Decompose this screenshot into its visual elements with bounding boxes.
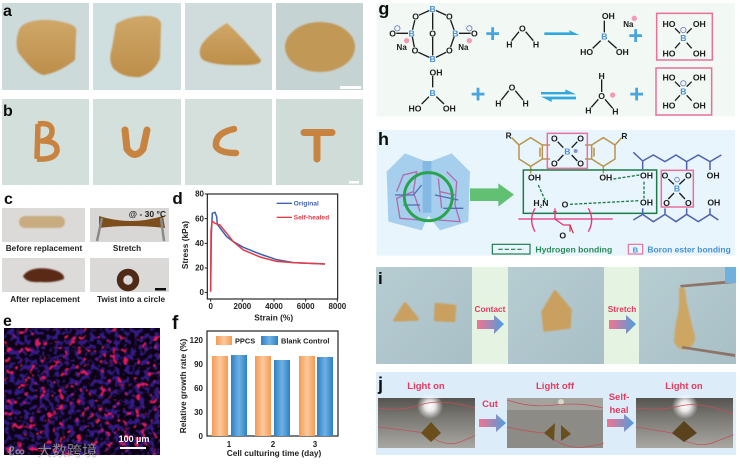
plus 3: + — [471, 80, 485, 108]
panel d: stress-strain chart — [172, 189, 347, 323]
bars day 1 — [212, 355, 247, 436]
label c: c — [4, 191, 13, 208]
y ticks f: 120 — [190, 336, 204, 345]
watermark logo: ℓ∞ — [8, 443, 25, 459]
boric acid 1: OH — [616, 47, 629, 57]
gel disc — [285, 22, 355, 72]
hydronium: H — [612, 107, 618, 117]
hydronium: H — [585, 106, 591, 116]
caption after: After replacement — [10, 295, 80, 304]
legend — [277, 201, 329, 222]
photo light off — [507, 398, 603, 448]
hydronium: H — [599, 71, 605, 81]
scale bar b — [349, 181, 359, 184]
hydronium — [585, 71, 618, 117]
tetrahydroxyborate box 2: HO — [663, 72, 676, 82]
scale label: 100 µm — [119, 434, 149, 444]
x ticks: 8000 — [328, 302, 347, 311]
plus 2: + — [628, 22, 643, 50]
water 2 — [495, 82, 529, 108]
OH and amine text: OH — [528, 173, 541, 183]
borate cage: B — [430, 54, 436, 64]
text light off: Light off — [536, 381, 575, 392]
R labels: R — [506, 130, 512, 140]
y ticks: 60 — [195, 214, 205, 223]
boric acid 2: OH — [430, 68, 442, 78]
photo light on — [378, 393, 475, 448]
x ticks: 2000 — [233, 302, 252, 311]
y ticks f: 30 — [194, 408, 204, 417]
equilibrium arrows — [541, 89, 576, 102]
y ticks: 80 — [195, 190, 205, 199]
y ticks: 0 — [200, 288, 205, 297]
gel triangle — [200, 23, 261, 65]
boron ester right — [662, 171, 692, 208]
borate cage: O — [429, 28, 436, 38]
triangle gel — [395, 304, 417, 320]
text self-heal: heal — [609, 405, 629, 416]
green circle — [404, 173, 452, 221]
boric acid 1: B — [601, 32, 607, 42]
panel g: boron chemistry — [377, 0, 735, 117]
curve self-healed — [211, 221, 325, 292]
borate cage: O — [412, 46, 419, 56]
water 2: H — [523, 98, 529, 108]
hydronium: O — [598, 91, 605, 101]
boron ester top: O — [551, 159, 558, 169]
label a: a — [3, 3, 12, 20]
R labels — [506, 130, 627, 141]
label h: h — [378, 129, 389, 149]
borate cage: Na — [458, 43, 469, 52]
pink box top — [547, 133, 587, 168]
x title f: Cell culturing time (day) — [227, 448, 321, 458]
boric acid 2: B — [430, 88, 436, 98]
panel h: network structure — [377, 129, 735, 256]
y ticks: 40 — [195, 239, 205, 248]
text light on 2: Light on — [665, 381, 703, 392]
tweezers — [680, 280, 735, 357]
water 2: O — [509, 82, 516, 92]
tetrahydroxyborate box 1: B — [680, 33, 686, 43]
bars day 3 — [299, 356, 333, 436]
borate cage: B — [430, 4, 436, 14]
arrow cut — [479, 414, 506, 432]
green arrow — [470, 183, 514, 207]
text cut: Cut — [482, 399, 499, 410]
label b: b — [3, 103, 13, 120]
OH and amine text: 2 — [540, 203, 543, 208]
boron ester right: O — [685, 198, 692, 208]
boron ester top: O — [577, 159, 584, 169]
label i: i — [378, 269, 383, 288]
legend boron: Boron ester bonding — [647, 244, 731, 254]
y title f: Relative growth rate (%) — [178, 339, 188, 433]
letter T — [304, 132, 332, 159]
OH and amine text: H — [533, 198, 540, 208]
boric acid 1 — [580, 11, 637, 57]
x ticks f: 3 — [313, 440, 318, 449]
tetrahydroxyborate box 1: OH — [693, 19, 706, 29]
x ticks: 0 — [208, 302, 213, 311]
arrow heal — [607, 414, 634, 432]
blue polymer bottom — [633, 208, 718, 222]
stretch label: Stretch — [608, 304, 636, 314]
caption stretch: Stretch — [113, 244, 141, 253]
scale bar c — [155, 288, 166, 290]
curve original — [211, 212, 325, 292]
label f: f — [172, 313, 179, 334]
carbonyl O: O — [559, 230, 566, 240]
x ticks f: 1 — [227, 440, 232, 449]
watermark text: 大数跨境 — [37, 442, 97, 460]
R labels: R — [621, 131, 627, 141]
caption before: Before replacement — [6, 244, 82, 253]
boric acid 1: OH — [602, 11, 615, 21]
arrow forward — [544, 30, 579, 35]
square gel — [435, 304, 455, 321]
letter B — [37, 124, 57, 159]
panel f: growth bar chart — [172, 313, 338, 458]
scale bar e — [120, 447, 146, 449]
right OH: OH — [707, 171, 720, 181]
dark gel — [23, 268, 64, 282]
right OH — [707, 171, 720, 208]
y ticks f — [190, 336, 204, 441]
plus 4: + — [629, 80, 644, 108]
boron ester right: B — [674, 183, 680, 193]
boric acid 2: OH — [443, 103, 456, 113]
legend hydrogen: Hydrogen bonding — [535, 244, 612, 254]
boron ester top: O — [551, 133, 558, 143]
tetrahydroxyborate box 2: OH — [693, 101, 706, 111]
green box — [523, 170, 657, 213]
boron ester top — [551, 133, 584, 169]
borate cage: Na — [397, 43, 407, 52]
OH and amine text — [528, 171, 653, 210]
x ticks f: 2 — [271, 440, 276, 449]
caption twist: Twist into a circle — [97, 295, 165, 304]
hydrogen bonds — [538, 175, 644, 204]
phenol rings — [512, 138, 622, 173]
y ticks f: 0 — [199, 432, 204, 441]
scale bar a — [340, 86, 361, 89]
blue polymer top — [633, 152, 721, 170]
tetrahydroxyborate box 1: HO — [663, 48, 676, 58]
tetrahydroxyborate box 1: HO — [663, 19, 676, 29]
label d: d — [172, 189, 183, 208]
panel a: gel shapes — [2, 3, 363, 90]
hydrogel illustration — [387, 153, 470, 230]
plus 1: + — [485, 20, 500, 48]
y ticks f: 60 — [194, 384, 204, 393]
y ticks f: 90 — [194, 360, 204, 369]
stretched gel with tweezers — [99, 216, 165, 228]
legend f — [216, 336, 329, 346]
legend f: PPCS — [235, 336, 255, 346]
x ticks: 4000 — [265, 302, 283, 311]
boron ester right: O — [662, 171, 669, 181]
legend: Original — [294, 201, 319, 208]
y ticks — [195, 190, 205, 297]
healed gel — [543, 292, 570, 330]
water 2: H — [495, 98, 501, 108]
y ticks: 20 — [195, 264, 205, 273]
stretched gel — [674, 287, 695, 350]
borate cage: O — [389, 28, 396, 38]
right OH: OH — [707, 198, 720, 208]
gel cylinder — [110, 16, 161, 77]
y axis title: Stress (kPa) — [180, 221, 190, 269]
borate cage: O — [412, 12, 419, 22]
OH and amine text: N — [542, 198, 548, 208]
label e: e — [3, 313, 12, 330]
tetrahydroxyborate box 2: B — [680, 86, 686, 96]
tetrahydroxyborate box 1 — [657, 13, 712, 60]
pale gel — [19, 216, 65, 228]
tetrahydroxyborate box 2: HO — [663, 101, 676, 111]
boron ester right: O — [685, 171, 692, 181]
water 1: H — [506, 40, 512, 50]
OH and amine text: OH — [599, 173, 612, 183]
contact label: Contact — [475, 304, 506, 314]
x ticks f — [227, 440, 318, 449]
legend f: Blank Control — [281, 336, 329, 346]
arrow stretch — [609, 315, 636, 334]
legend hydrogen — [492, 244, 612, 254]
OH and amine text: OH — [640, 197, 653, 207]
borate cage: B — [452, 28, 458, 38]
letter C — [216, 129, 236, 153]
boric acid 1: Na — [623, 20, 634, 29]
gel cube — [16, 20, 76, 75]
panel c: replacement photos — [2, 191, 169, 304]
borate cage — [389, 4, 478, 64]
boron ester top: B — [564, 146, 570, 156]
pink polymer — [518, 208, 613, 232]
text self-heal: Self- — [609, 392, 629, 403]
pink box right — [661, 170, 693, 207]
OH and amine text: O — [562, 200, 569, 210]
letter U — [125, 130, 147, 154]
water 1: H — [533, 40, 539, 50]
tetrahydroxyborate box 1: OH — [693, 48, 706, 58]
glove — [725, 267, 736, 283]
x axis title: Strain (%) — [254, 313, 293, 323]
label j: j — [377, 374, 383, 394]
text light on 1: Light on — [407, 381, 445, 392]
arrow contact — [477, 315, 504, 334]
tetrahydroxyborate box 2: OH — [693, 72, 706, 82]
boric acid 1: HO — [580, 47, 593, 57]
water 1: O — [519, 23, 526, 33]
boron ester top: O — [577, 133, 584, 143]
borate cage: B — [409, 28, 415, 38]
legend: Self-healed — [294, 215, 329, 222]
borate cage: O — [446, 46, 453, 56]
borate cage: O — [446, 12, 453, 22]
tetrahydroxyborate box 2 — [656, 68, 712, 115]
panel i: contact and stretch photos — [376, 267, 736, 364]
photo light on healed — [636, 393, 733, 448]
legend boron: B — [633, 245, 639, 254]
panel j: circuit self-healing — [376, 372, 736, 455]
water 1 — [506, 23, 539, 50]
panel e: fluorescence image — [4, 328, 160, 460]
boron ester right: O — [663, 198, 670, 208]
boric acid 2: HO — [409, 103, 422, 113]
borate cage: O — [471, 28, 478, 38]
boric acid 2 — [409, 68, 456, 113]
x ticks — [208, 302, 347, 311]
temperature label: @ - 30 °C — [129, 209, 166, 219]
panel b: BUCT letters — [2, 99, 363, 185]
twisted circle — [120, 272, 136, 288]
OH and amine text: OH — [640, 171, 653, 181]
bars day 2 — [255, 356, 290, 436]
x ticks: 6000 — [297, 302, 315, 311]
